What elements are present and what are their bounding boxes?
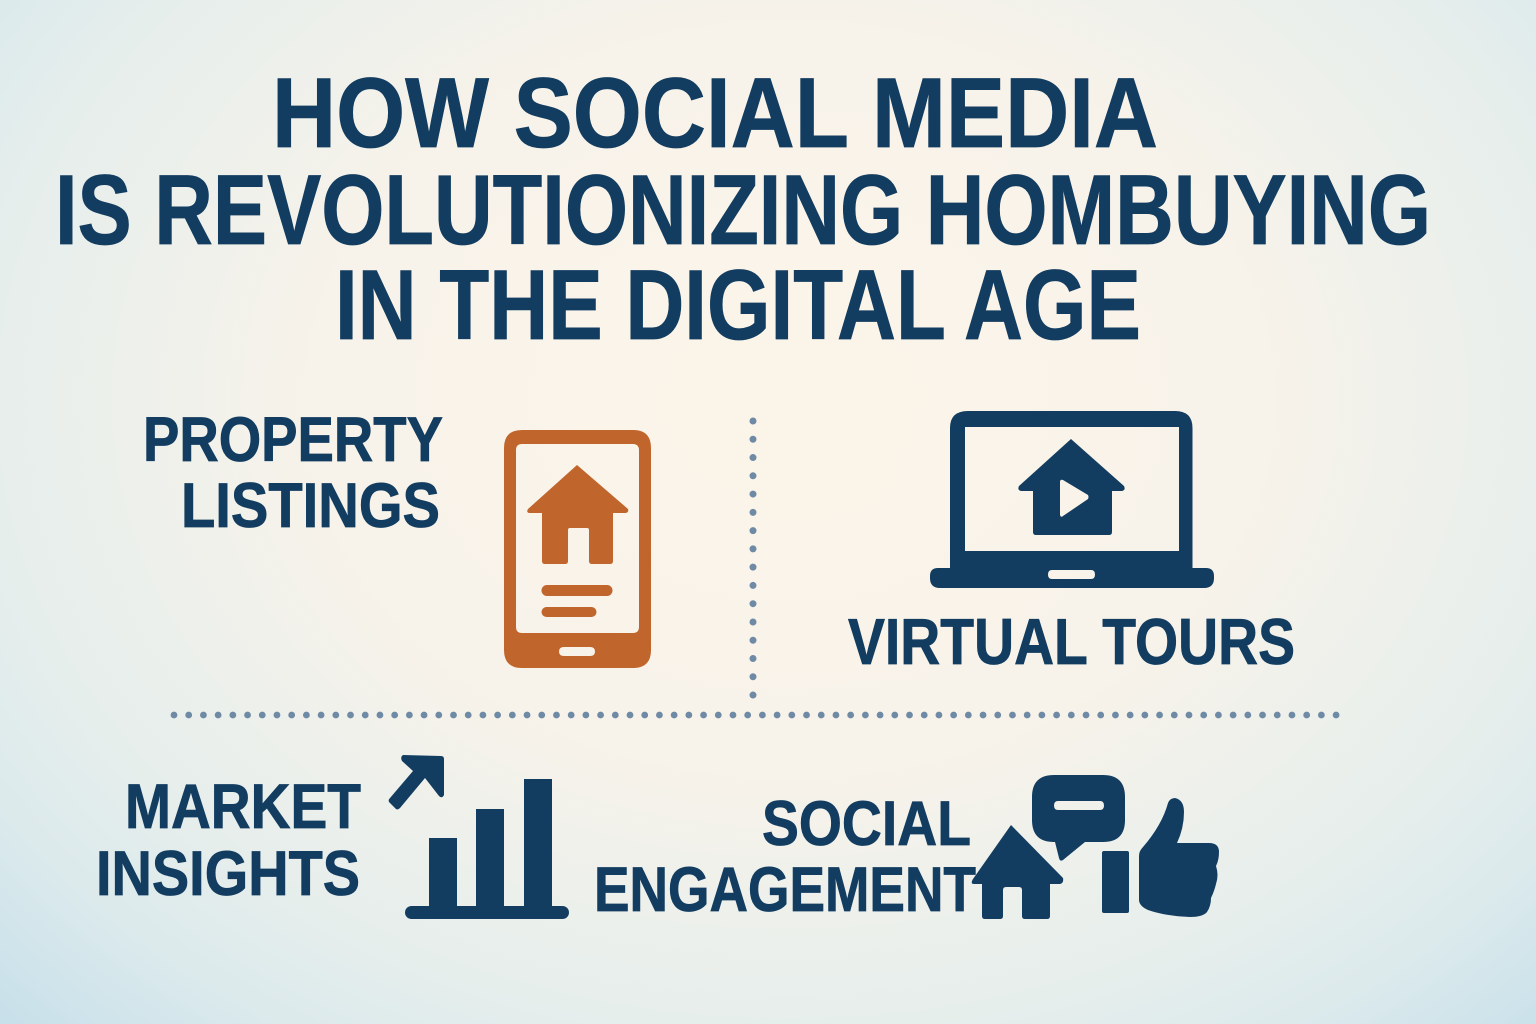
icon: house, chat bubble and thumbs up bbox=[972, 775, 1219, 919]
icon: phone with house listing bbox=[504, 430, 651, 668]
label: social engagement bbox=[594, 789, 976, 925]
label: virtual tours: VIRTUAL TOURS bbox=[848, 605, 1295, 678]
label: social engagement: SOCIAL bbox=[762, 789, 971, 859]
label: market insights: INSIGHTS bbox=[96, 839, 360, 909]
label: social engagement: ENGAGEMENT bbox=[594, 855, 976, 925]
icon: bar chart with rising arrow bbox=[389, 755, 569, 919]
icon: laptop with house video bbox=[930, 411, 1214, 588]
label: property listings bbox=[143, 405, 443, 541]
label: property listings: LISTINGS bbox=[181, 471, 440, 541]
title: IN THE DIGITAL AGE bbox=[335, 249, 1141, 360]
label: market insights: MARKET bbox=[125, 772, 361, 842]
vertical dotted divider bbox=[750, 421, 756, 696]
title bbox=[55, 57, 1431, 360]
label: property listings: PROPERTY bbox=[143, 405, 443, 475]
horizontal dotted divider bbox=[174, 712, 1337, 718]
label: market insights bbox=[96, 772, 361, 909]
title: HOW SOCIAL MEDIA bbox=[272, 57, 1158, 168]
